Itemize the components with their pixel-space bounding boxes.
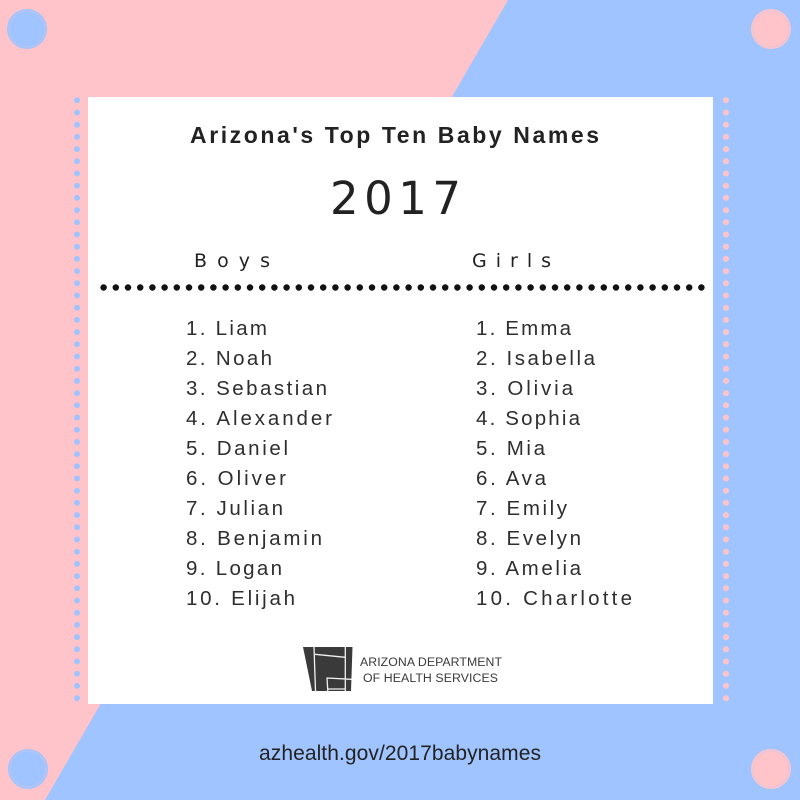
logo text: OF HEALTH SERVICES	[363, 671, 498, 685]
list: boys: 8. Benjamin	[186, 527, 322, 550]
corner circle: top right	[751, 9, 791, 49]
list: boys: 6. Oliver	[186, 467, 286, 490]
corner circle: bottom right	[751, 749, 791, 789]
year: 2017	[330, 172, 461, 225]
list: boys: 9. Logan	[186, 557, 282, 580]
list: boys: 3. Sebastian	[186, 377, 327, 400]
list: girls: 8. Evelyn	[476, 527, 581, 550]
column heading: boys: Boys	[194, 250, 270, 272]
column heading: girls: Girls	[472, 250, 551, 272]
list: girls: 5. Mia	[476, 437, 546, 460]
website url: azhealth.gov/2017babynames	[259, 742, 541, 765]
dotted border: right	[723, 100, 729, 700]
white panel	[88, 97, 713, 704]
list: girls	[476, 317, 632, 610]
list: boys: 10. Elijah	[186, 587, 295, 610]
list: boys: 5. Daniel	[186, 437, 288, 460]
list: girls: 7. Emily	[476, 497, 568, 520]
list: boys: 1. Liam	[186, 317, 267, 340]
title: Arizona's Top Ten Baby Names	[190, 122, 599, 148]
list: girls: 3. Olivia	[476, 377, 574, 400]
corner circle: bottom left	[8, 749, 48, 789]
list: girls: 1. Emma	[476, 317, 572, 340]
list: boys: 2. Noah	[186, 347, 272, 370]
corner circle: top left	[7, 9, 47, 49]
logo text	[360, 655, 502, 685]
list: girls: 2. Isabella	[476, 347, 596, 370]
list: girls: 4. Sophia	[476, 407, 581, 430]
list: boys	[186, 317, 332, 610]
list: boys: 7. Julian	[186, 497, 283, 520]
list: girls: 6. Ava	[476, 467, 547, 490]
list: girls: 10. Charlotte	[476, 587, 632, 610]
dotted divider	[104, 284, 702, 291]
logo mark	[303, 647, 352, 691]
logo: Arizona Department of Health Services	[303, 647, 502, 691]
logo text: ARIZONA DEPARTMENT	[360, 655, 502, 669]
dotted border: left	[74, 100, 80, 700]
list: boys: 4. Alexander	[186, 407, 332, 430]
list: girls: 9. Amelia	[476, 557, 582, 580]
